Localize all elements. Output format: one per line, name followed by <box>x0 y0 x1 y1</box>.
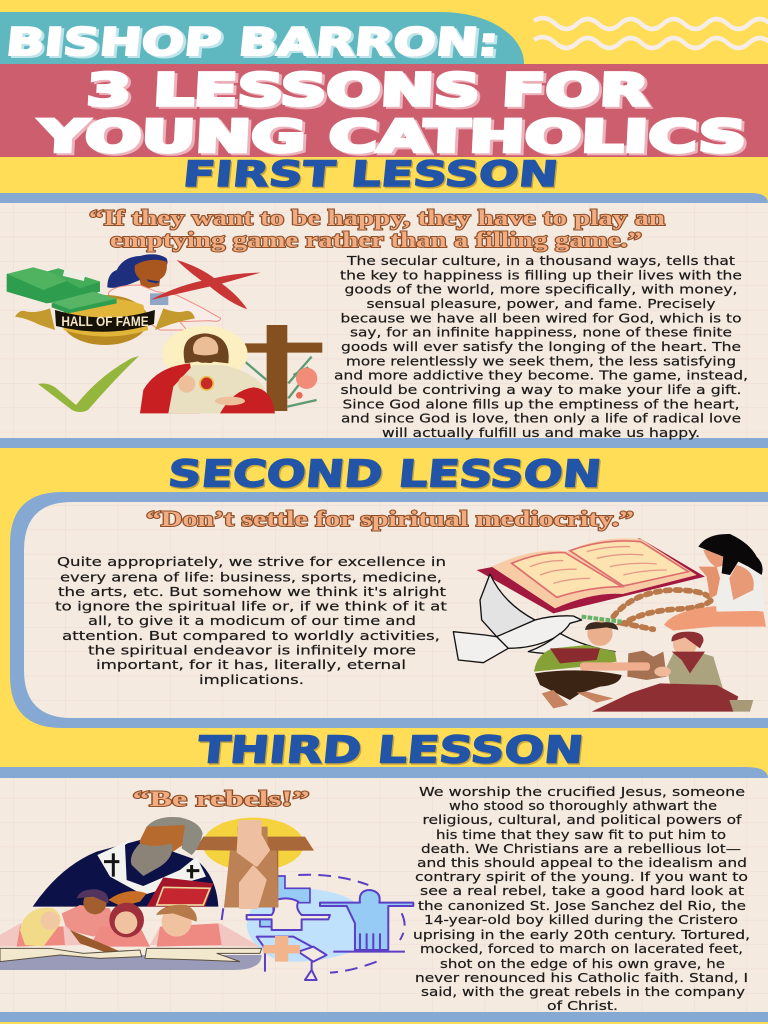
title: 3 Lessons for Young Catholics: 3 LESSONS FOR <box>86 65 650 116</box>
illustration: dove <box>453 574 615 663</box>
illustration: praying woman <box>664 534 766 631</box>
text block: first lesson: will actually fulfill us and make us happy. <box>382 426 700 440</box>
text block: second lesson: all, to give it a modicum of our time and <box>88 614 416 628</box>
text block: third lesson: of Christ. <box>547 999 618 1013</box>
text block: first lesson: goods of the world, more specifically, with money, <box>344 283 738 297</box>
header banner: teal tab <box>0 12 524 64</box>
heading: Third Lesson: THIRD LESSON <box>198 730 587 773</box>
text block: first lesson: more relentlessly we seek them, the less satisfying <box>346 354 736 368</box>
text block: third lesson: uprising in the early 20th century. Tortured, <box>413 928 750 942</box>
illustration: seated person with bag <box>580 632 753 712</box>
title band <box>0 64 768 157</box>
title: 3 Lessons for Young Catholics <box>36 65 750 164</box>
quote: first lesson: “If they want to be happy, they have to play an <box>89 205 666 230</box>
illustration: bishop with book <box>33 817 218 907</box>
text block: third lesson: We worship the crucified Jesus, someone <box>419 785 745 799</box>
heading: First Lesson: FIRST LESSON <box>182 156 562 196</box>
heading: Second Lesson: SECOND LESSON <box>168 454 605 497</box>
text block: second lesson: important, for it has, literally, eternal <box>96 658 406 672</box>
quote: first lesson: emptying game rather than a filling game.” <box>110 227 642 252</box>
text block: second lesson: Quite appropriately, we strive for excellence in <box>57 555 446 569</box>
illustration: blue faith icons <box>222 875 413 980</box>
text block: third lesson: contrary spirit of the young. If you want to <box>415 870 748 884</box>
quote: second lesson: “Don’t settle for spiritual mediocrity.” <box>146 506 634 531</box>
heading: Third Lesson: THIRD LESSON <box>196 729 585 771</box>
heading: Second Lesson: SECOND LESSON <box>166 453 603 495</box>
text block: first lesson: and more addictive they become. The game, instead, <box>334 369 748 383</box>
heading: Bishop Barron: BISHOP BARRON: <box>7 22 503 66</box>
icon: rosary <box>613 590 712 629</box>
text block: first lesson: goods will ever satisfy the longing of the heart. The <box>341 340 741 354</box>
text block: third lesson: the canonized St. Jose Sanchez del Rio, the <box>418 899 746 913</box>
text block: third lesson: see a real rebel, take a good hard look at <box>420 884 744 898</box>
icon: hall of fame badge <box>15 295 195 345</box>
text block: second lesson: to ignore the spiritual life or, if we think of it at <box>55 600 447 614</box>
text block: second lesson: attention. But compared to worldly activities, <box>62 629 440 643</box>
text block: second lesson <box>55 555 447 687</box>
text block: first lesson: sensual pleasure, power, and fame. Precisely <box>366 297 716 311</box>
heading: First Lesson: FIRST LESSON <box>181 154 560 195</box>
text block: second lesson: the spiritual endeavor is infinitely more <box>88 644 416 658</box>
illustration: cross with hands <box>195 818 314 907</box>
text block: third lesson: said, with the great rebels in the company <box>421 985 745 999</box>
panel: first lesson <box>0 193 768 448</box>
text block: third lesson: death. We Christians are a rebellious lot— <box>421 842 741 856</box>
decorative waves <box>534 18 768 48</box>
text block: first lesson: Since God alone fills up the emptiness of the heart, <box>342 397 740 411</box>
text block: third lesson: never renounced his Catholic faith. Stand, I <box>415 971 748 985</box>
text block: first lesson: say, for an infinite happiness, none of these finite <box>350 326 732 340</box>
text block: second lesson: implications. <box>199 673 304 687</box>
quote: first lesson <box>89 205 666 252</box>
text block: first lesson: and since God is love, then only a life of radical love <box>341 412 741 426</box>
panel: third lesson <box>0 767 768 1022</box>
heading: Bishop Barron: BISHOP BARRON: <box>4 20 500 64</box>
icon: green check mark <box>38 356 139 412</box>
title: 3 Lessons for Young Catholics: YOUNG CATHOLICS <box>39 114 750 164</box>
text block: first lesson <box>334 254 748 440</box>
text block: first lesson: because we have all been wired for God, which is to <box>340 311 742 325</box>
illustration: youth helping <box>534 617 622 708</box>
text block: third lesson: religious, cultural, and political powers of <box>422 813 742 827</box>
text block: second lesson: the arts, etc. But somehow we think it's alright <box>58 585 446 599</box>
title: 3 Lessons for Young Catholics: 3 LESSONS FOR <box>88 67 653 118</box>
illustration: open book <box>477 538 705 613</box>
quote: third lesson: “Be rebels!” <box>132 786 310 811</box>
text block: first lesson: the key to happiness is filling up their lives with the <box>340 268 742 282</box>
illustration: woman with red X <box>107 254 261 330</box>
text block: third lesson: mocked, forced to march on lacerated feet, <box>420 942 743 956</box>
icon: hall of fame badge: HALL OF FAME <box>61 313 149 329</box>
text block: third lesson: his time that they saw fit to put him to <box>436 828 726 842</box>
text block: third lesson: shot on the edge of his own grave, he <box>440 957 725 971</box>
text block: third lesson <box>413 785 750 1013</box>
title: 3 Lessons for Young Catholics: YOUNG CATHOLICS <box>36 112 748 162</box>
text block: second lesson: every arena of life: business, sports, medicine, <box>60 570 442 584</box>
text block: third lesson: who stood so thoroughly athwart the <box>449 799 717 813</box>
panel: second lesson <box>10 492 768 728</box>
illustration: students studying <box>0 889 262 970</box>
illustration: Jesus with cross <box>140 325 322 413</box>
text block: third lesson: and this should appeal to the idealism and <box>417 856 747 870</box>
text block: first lesson: should be contriving a way to make your life a gift. <box>340 383 742 397</box>
text block: first lesson: The secular culture, in a thousand ways, tells that <box>346 254 735 268</box>
text block: third lesson: 14-year-old boy killed during the Cristero <box>424 913 738 927</box>
icon: cash stacks <box>7 267 117 313</box>
